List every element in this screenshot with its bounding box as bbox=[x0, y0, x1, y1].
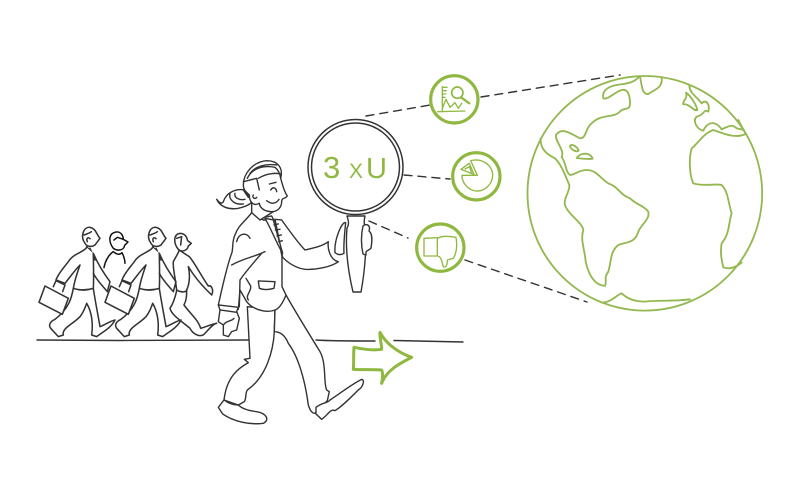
figure: colleague with briefcase 2 bbox=[105, 227, 181, 337]
jacket bbox=[218, 213, 286, 311]
hanging hand and cuff bbox=[218, 305, 239, 337]
jacket details and pocket bbox=[232, 234, 275, 307]
outstretched arm bbox=[275, 219, 338, 269]
lens label: 3 bbox=[323, 150, 340, 185]
figure: colleague head and shoulders in black bbox=[104, 232, 128, 268]
lens rim inner bbox=[312, 123, 400, 211]
greenland bbox=[640, 77, 662, 94]
facial features and hair lines bbox=[230, 165, 281, 204]
figure: colleague with briefcase 1 bbox=[39, 227, 115, 337]
right leg and shoe bbox=[274, 295, 363, 419]
arrow: green forward arrow bbox=[353, 332, 412, 383]
globe outline bbox=[527, 76, 762, 311]
ground line bbox=[37, 340, 463, 342]
europe bbox=[689, 86, 746, 134]
icon: search over line chart bbox=[431, 76, 478, 123]
ear, face and hair bbox=[217, 161, 287, 220]
lens label: U bbox=[366, 153, 387, 185]
dashed connector lines bbox=[366, 75, 620, 302]
antarctica bbox=[604, 293, 690, 302]
africa bbox=[690, 130, 746, 268]
british isles bbox=[683, 93, 697, 110]
lens rim outer bbox=[308, 120, 403, 214]
shirt and striped tie bbox=[265, 218, 283, 253]
hand gripping handle bbox=[335, 223, 346, 255]
main businessman lower body bbox=[218, 295, 363, 424]
lens label: X bbox=[349, 160, 363, 183]
icon: book with thumbs down bbox=[417, 224, 464, 271]
main businessman upper body bbox=[217, 161, 346, 337]
figure: colleague walking without briefcase bbox=[170, 233, 217, 336]
handle bbox=[346, 216, 366, 292]
left leg and shoe bbox=[218, 307, 275, 424]
fingers on handle bbox=[362, 225, 372, 255]
caribbean islands bbox=[570, 145, 593, 159]
cuff line bbox=[220, 310, 237, 325]
icon: pie chart bbox=[453, 153, 500, 200]
walking colleagues bbox=[39, 227, 217, 337]
americas bbox=[541, 77, 649, 286]
magnifying glass bbox=[308, 120, 403, 292]
globe bbox=[527, 76, 762, 311]
